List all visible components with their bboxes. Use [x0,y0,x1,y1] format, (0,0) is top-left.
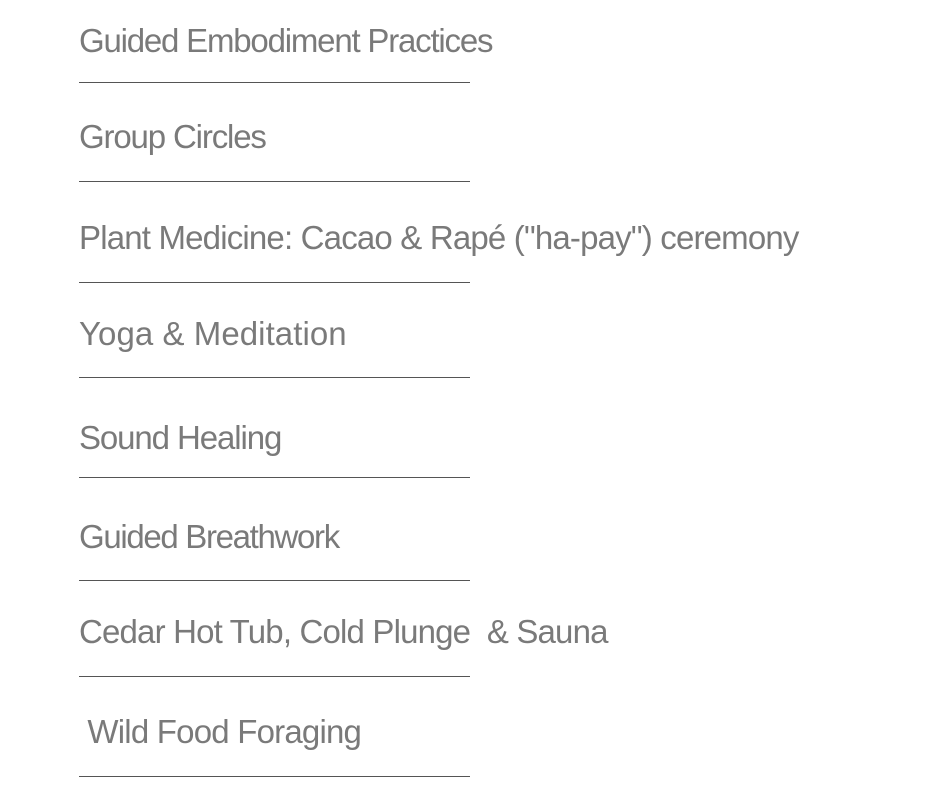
list item: Plant Medicine: Plant Medicine: Cacao & Rapé ("ha-pay") ceremony [79,219,799,256]
list item: Yoga & Meditation: Yoga & Meditation [79,315,347,352]
list item: Group Circles: Group Circles [79,118,266,155]
list item: Guided Breathwork: Guided Breathwork [79,518,339,555]
list item: Wild Food Foraging: Wild Food Foraging [87,713,361,750]
list item: Cedar Hot Tub, Cold Plunge & Sauna: Cedar Hot Tub, Cold Plunge & Sauna [79,613,608,650]
list item: Sound Healing: Sound Healing [79,419,281,456]
list item: Guided Embodiment Practices: Guided Embodiment Practices [79,22,492,59]
